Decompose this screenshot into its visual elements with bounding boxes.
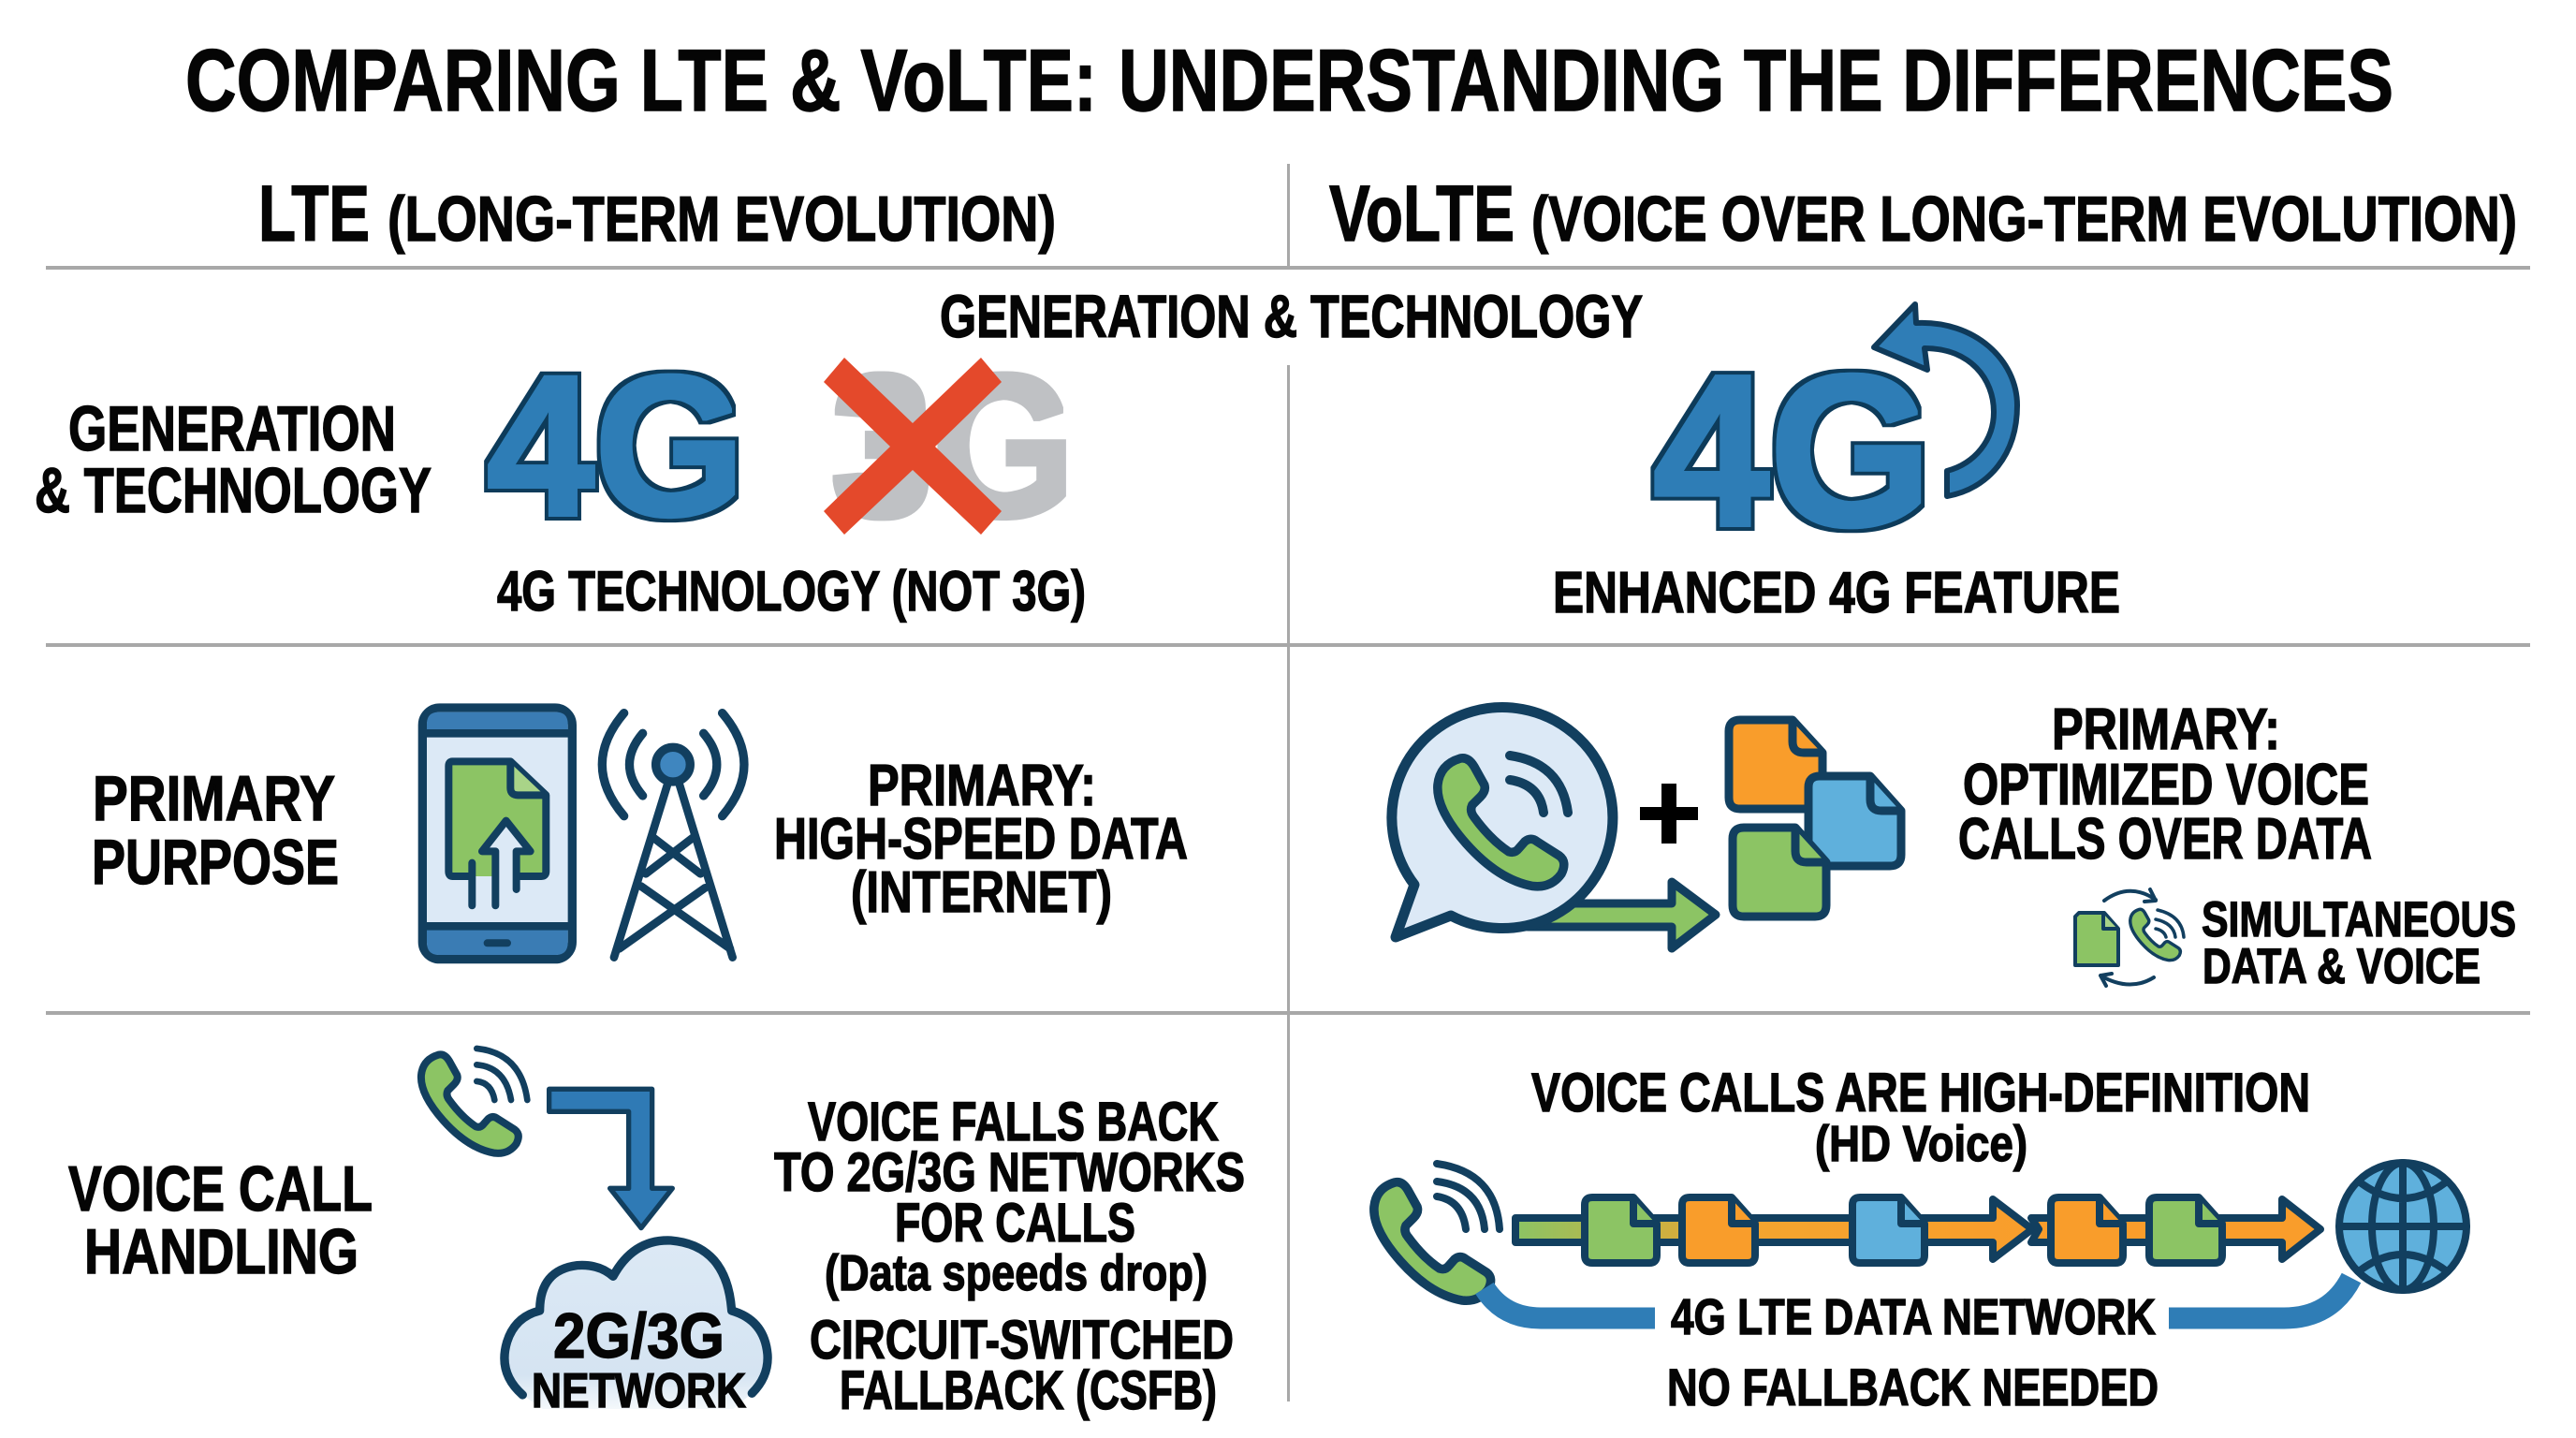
icon: handset — [1374, 1182, 1491, 1300]
column heading: VoLTE — [1329, 169, 2517, 257]
icon: 4G with enhancement arrow: 4G — [1653, 330, 1932, 571]
title: & VoLTE: — [790, 31, 1097, 129]
column heading: VoLTE: VoLTE — [1329, 169, 1515, 257]
text: LTE voice fallback: FOR CALLS — [895, 1193, 1135, 1254]
row label: generation and technology: GENERATION — [68, 393, 396, 464]
icon: handset in bubble — [1438, 758, 1564, 887]
icon: green file — [1733, 828, 1826, 917]
icon: 4G logo: 4G — [487, 334, 745, 558]
icon: cloud with 2G/3G network — [505, 1240, 768, 1418]
arrow: packet flow — [1515, 1199, 2032, 1259]
section heading: generation and technology: GENERATION & TECHNOLOGY — [940, 283, 1643, 350]
text: circuit-switched fallback: FALLBACK (CSFB) — [840, 1360, 1217, 1421]
caption: 4G technology: 4G TECHNOLOGY (NOT 3G) — [497, 560, 1086, 623]
text: circuit-switched fallback: CIRCUIT-SWITCHED — [810, 1310, 1234, 1371]
row label: generation and technology — [35, 393, 432, 526]
text: LTE voice fallback: TO 2G/3G NETWORKS — [774, 1142, 1245, 1203]
text: simultaneous data and voice: DATA & VOICE — [2203, 939, 2481, 994]
icon: crossed out 3G: 3G — [831, 332, 1075, 559]
text: VoLTE primary purpose: OPTIMIZED VOICE — [1963, 753, 2369, 817]
icon: globe — [2339, 1163, 2466, 1290]
text: HD voice — [1531, 1063, 2310, 1172]
text: LTE voice fallback: (Data speeds drop) — [825, 1245, 1208, 1301]
icon: plus — [1640, 784, 1698, 844]
label: 4G LTE data network: 4G LTE DATA NETWORK — [1671, 1289, 2156, 1345]
text: simultaneous data and voice — [2202, 892, 2516, 994]
text: LTE primary purpose: (INTERNET) — [851, 860, 1112, 925]
text: HD voice: (HD Voice) — [1815, 1116, 2027, 1172]
row label: primary purpose — [92, 763, 339, 898]
row label: primary purpose: PRIMARY — [93, 763, 335, 834]
icon: cloud with 2G/3G network: NETWORK — [532, 1364, 746, 1418]
icon: cell tower — [602, 713, 744, 958]
text: LTE primary purpose — [774, 754, 1188, 925]
icon: speech bubble — [1392, 708, 1613, 937]
icon: voice bubble, plus sign and data files — [1392, 708, 1901, 948]
row label: voice call handling: VOICE CALL — [68, 1153, 373, 1225]
text: LTE primary purpose: HIGH-SPEED DATA — [774, 807, 1188, 872]
text: VoLTE primary purpose: PRIMARY: — [2052, 697, 2280, 762]
text: VoLTE primary purpose: CALLS OVER DATA — [1958, 807, 2372, 872]
column heading: LTE: LTE — [258, 169, 370, 257]
arrow: fallback — [549, 1089, 672, 1228]
text: LTE primary purpose: PRIMARY: — [868, 754, 1096, 818]
label: no fallback needed: NO FALLBACK NEEDED — [1667, 1357, 2159, 1416]
row label: primary purpose: PURPOSE — [92, 827, 339, 898]
title: COMPARING LTE — [185, 31, 768, 129]
row label: voice call handling: HANDLING — [84, 1216, 359, 1287]
icon: orange file — [1729, 720, 1822, 809]
text: VoLTE primary purpose — [1958, 697, 2372, 872]
diagram: voice packets over 4G LTE to globe — [1374, 1163, 2466, 1318]
column heading: LTE — [258, 169, 1056, 257]
text: circuit-switched fallback — [810, 1310, 1234, 1421]
network bracket — [1485, 1278, 2351, 1318]
icon: simultaneous data and voice — [2075, 889, 2184, 986]
column heading: LTE: (LONG-TERM EVOLUTION) — [388, 183, 1056, 255]
icon: handset — [421, 1049, 527, 1153]
icon: blue file — [1808, 776, 1901, 866]
row label: generation and technology: & TECHNOLOGY — [35, 455, 432, 526]
text: HD voice: VOICE CALLS ARE HIGH-DEFINITION — [1531, 1063, 2310, 1123]
icon: cloud with 2G/3G network: 2G/3G — [553, 1300, 724, 1372]
caption: enhanced 4G feature: ENHANCED 4G FEATURE — [1553, 561, 2120, 625]
row label: voice call handling — [68, 1153, 373, 1287]
text: LTE voice fallback: VOICE FALLS BACK — [808, 1092, 1219, 1152]
icon: smartphone with data upload — [422, 708, 572, 960]
title — [185, 31, 2393, 129]
text: LTE voice fallback — [774, 1092, 1245, 1301]
arrow: voice to data — [1528, 882, 1716, 948]
icon: data packets — [1585, 1197, 2222, 1263]
icon: handset with fallback arrow to 2G/3G cloud — [421, 1049, 768, 1418]
